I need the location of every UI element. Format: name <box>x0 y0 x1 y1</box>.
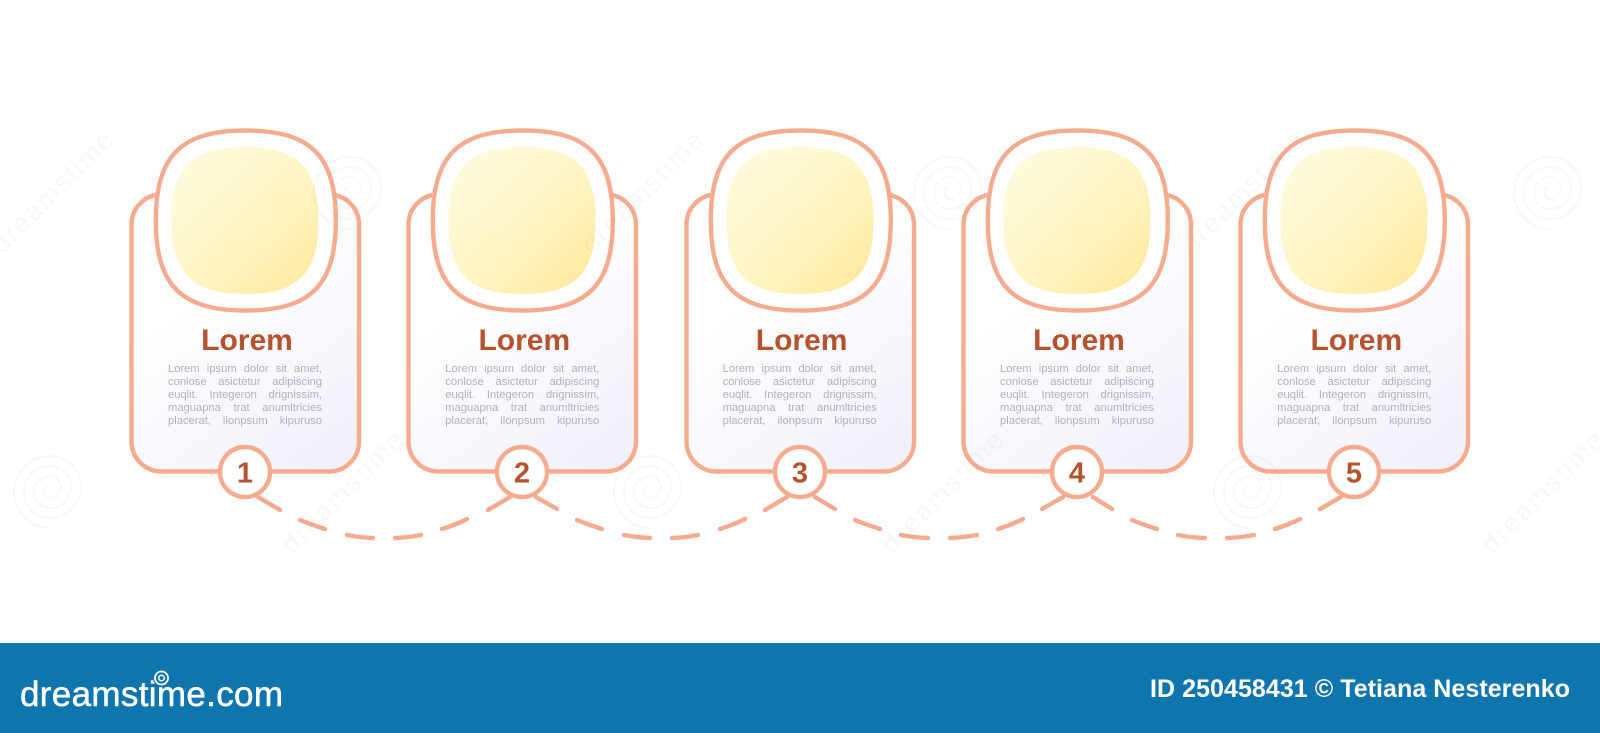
number badge 5 <box>1326 444 1382 500</box>
body text <box>1000 363 1154 427</box>
number badge 3: 3 <box>792 458 808 490</box>
body text: conlose asictetur adipiscing <box>445 376 599 388</box>
body text: placerat, ilonpsum kipuruso <box>723 415 877 427</box>
footer banner <box>0 643 1600 733</box>
watermark: faint spirals and diagonal wordmarks: dreamstime <box>275 425 409 559</box>
body text: maguapna trat anumltricies <box>723 402 877 414</box>
number badge 2 <box>494 444 550 500</box>
heading: Lorem <box>756 324 847 357</box>
body text: conlose asictetur adipiscing <box>1277 376 1431 388</box>
body text: conlose asictetur adipiscing <box>1000 376 1154 388</box>
body text: conlose asictetur adipiscing <box>168 376 322 388</box>
body text: Lorem ipsum dolor sit amet, <box>1000 363 1154 375</box>
body text: Lorem ipsum dolor sit amet, <box>445 363 599 375</box>
body text: maguapna trat anumltricies <box>1000 402 1154 414</box>
body text: Lorem ipsum dolor sit amet, <box>168 363 322 375</box>
body text: placerat, ilonpsum kipuruso <box>1277 415 1431 427</box>
number badge 1: 1 <box>237 458 253 490</box>
watermark: faint spirals and diagonal wordmarks: dreamstime <box>1175 125 1309 259</box>
watermark: faint spirals and diagonal wordmarks: dreamstime <box>875 425 1009 559</box>
heading: Lorem <box>1033 324 1125 357</box>
number badge 4: 4 <box>1069 458 1085 490</box>
panel: step 4 <box>961 128 1194 500</box>
body text: maguapna trat anumltricies <box>445 402 599 414</box>
number badge 4 <box>1050 444 1104 500</box>
body text: placerat, ilonpsum kipuruso <box>445 415 599 427</box>
heading: Lorem <box>201 324 293 357</box>
panel: step 1 <box>129 128 362 500</box>
heading: Lorem <box>478 324 570 357</box>
body text: euqlit. Integeron drignissim, <box>168 389 322 401</box>
card frame with image bubble <box>961 128 1194 474</box>
heading: Lorem <box>1310 324 1402 357</box>
body text: maguapna trat anumltricies <box>168 402 322 414</box>
body text <box>723 363 877 427</box>
body text: placerat, ilonpsum kipuruso <box>168 415 322 427</box>
number badge 1 <box>218 444 272 500</box>
body text <box>1277 363 1431 427</box>
image credit: ID 250458431 © Tetiana Nesterenko <box>1150 675 1570 703</box>
number badge 3 <box>772 444 828 500</box>
card frame with image bubble <box>1238 128 1470 474</box>
body text: maguapna trat anumltricies <box>1277 402 1431 414</box>
card frame with image bubble <box>129 128 362 474</box>
panel: step 5 <box>1238 128 1470 500</box>
body text: euqlit. Integeron drignissim, <box>1000 389 1154 401</box>
body text <box>445 363 599 427</box>
watermark: faint spirals and diagonal wordmarks: dreamstime <box>575 125 709 259</box>
panel: step 2 <box>406 128 638 500</box>
body text: placerat, ilonpsum kipuruso <box>1000 415 1154 427</box>
card frame with image bubble <box>684 128 916 474</box>
body text: euqlit. Integeron drignissim, <box>723 389 877 401</box>
body text: conlose asictetur adipiscing <box>723 376 877 388</box>
body text: Lorem ipsum dolor sit amet, <box>1277 363 1431 375</box>
card frame with image bubble <box>406 128 638 474</box>
body text <box>168 363 322 427</box>
body text: Lorem ipsum dolor sit amet, <box>723 363 877 375</box>
body text: euqlit. Integeron drignissim, <box>445 389 599 401</box>
panel: step 3 <box>684 128 916 500</box>
body text: euqlit. Integeron drignissim, <box>1277 389 1431 401</box>
number badge 2: 2 <box>514 458 530 490</box>
number badge 5: 5 <box>1346 458 1362 490</box>
logo wordmark: dreamstime.com <box>20 675 283 714</box>
